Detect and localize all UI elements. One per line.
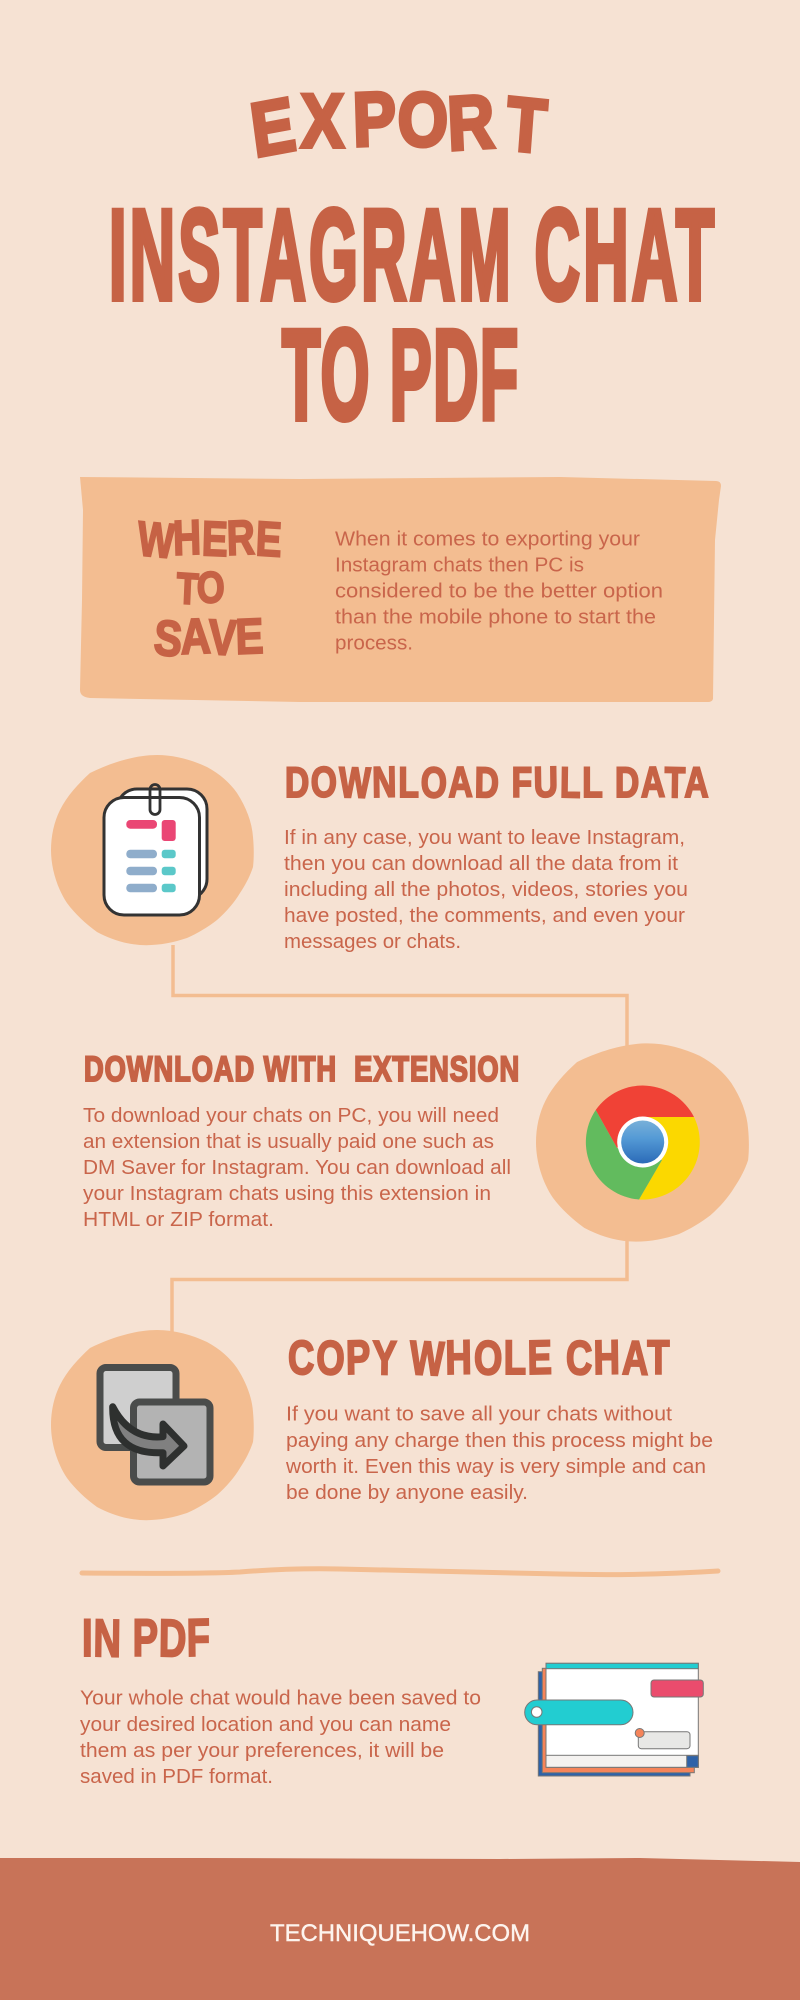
text: in pdf body: [80, 1688, 481, 1788]
text: download with extension body: an extension that is usually paid one such as: [83, 1131, 494, 1153]
heading: where to save: [136, 511, 283, 667]
title: Export: EXPORT: [246, 75, 549, 173]
text: download full data body: [284, 827, 688, 953]
text: copy whole chat body: If you want to save all your chats without: [286, 1404, 672, 1426]
text: where to save body: than the mobile phone to start the: [335, 606, 656, 628]
text: in pdf body: them as per your preferences, it will be: [80, 1740, 444, 1762]
text: where to save body: process.: [335, 632, 413, 654]
text: where to save body: When it comes to exporting your: [335, 528, 640, 550]
text: download with extension body: DM Saver for Instagram. You can download all: [83, 1157, 511, 1179]
text: download with extension body: your Instagram chats using this extension in: [83, 1183, 491, 1205]
text: where to save body: considered to be the better option: [335, 580, 663, 602]
text: download with extension body: To download your chats on PC, you will need: [83, 1105, 499, 1127]
text: in pdf body: saved in PDF format.: [80, 1766, 273, 1788]
divider: [82, 1569, 718, 1575]
text: copy whole chat body: [285, 1404, 713, 1504]
icon: chrome logo: [536, 1043, 749, 1242]
icon: copy pages with arrow: [51, 1330, 254, 1520]
text: download with extension body: [83, 1105, 511, 1231]
text: download full data body: including all the photos, videos, stories you: [284, 879, 688, 901]
text: where to save body: [335, 528, 663, 654]
footer band: [0, 1858, 800, 2000]
title: Instagram Chat to PDF: INSTAGRAM CHAT: [109, 185, 714, 327]
step: download full data: [284, 759, 709, 953]
heading: where to save: TO: [175, 563, 225, 614]
heading: where to save: SAVE: [152, 608, 264, 667]
title: Instagram Chat to PDF: [109, 185, 714, 447]
text: download full data body: then you can download all the data from it: [284, 853, 678, 875]
heading: in pdf: IN PDF: [82, 1607, 210, 1668]
icon: chat window: [525, 1663, 703, 1776]
footer: website: TECHNIQUEHOW.COM: [270, 1920, 530, 1947]
text: download with extension body: HTML or ZIP format.: [83, 1209, 274, 1231]
text: in pdf body: your desired location and you can name: [80, 1714, 451, 1736]
heading: download with extension: DOWNLOAD WITH EXTENSION: [84, 1050, 519, 1089]
text: where to save body: Instagram chats then PC is: [335, 554, 584, 576]
heading: copy whole chat: COPY WHOLE CHAT: [288, 1331, 670, 1387]
text: copy whole chat body: paying any charge then this process might be: [286, 1430, 713, 1452]
step: copy whole chat: [285, 1331, 713, 1504]
text: download full data body: If in any case, you want to leave Instagram,: [284, 827, 685, 849]
connector: second step to third: [172, 1241, 627, 1332]
step: in pdf: [80, 1607, 481, 1788]
text: copy whole chat body: be done by anyone easily.: [286, 1482, 528, 1504]
text: download full data body: messages or chats.: [284, 931, 461, 953]
text: in pdf body: Your whole chat would have been saved to: [80, 1688, 481, 1710]
text: copy whole chat body: worth it. Even this way is very simple and can: [285, 1456, 706, 1478]
heading: where to save: WHERE: [136, 511, 283, 569]
title: Instagram Chat to PDF: TO PDF: [282, 305, 518, 447]
text: download full data body: have posted, the comments, and even your: [284, 905, 685, 927]
heading: download full data: DOWNLOAD FULL DATA: [285, 759, 709, 808]
panel: where to save: [80, 477, 721, 702]
step: download with extension: [83, 1050, 519, 1231]
icon: document with paperclip: [51, 755, 254, 945]
connector: first step to second: [173, 945, 627, 1047]
